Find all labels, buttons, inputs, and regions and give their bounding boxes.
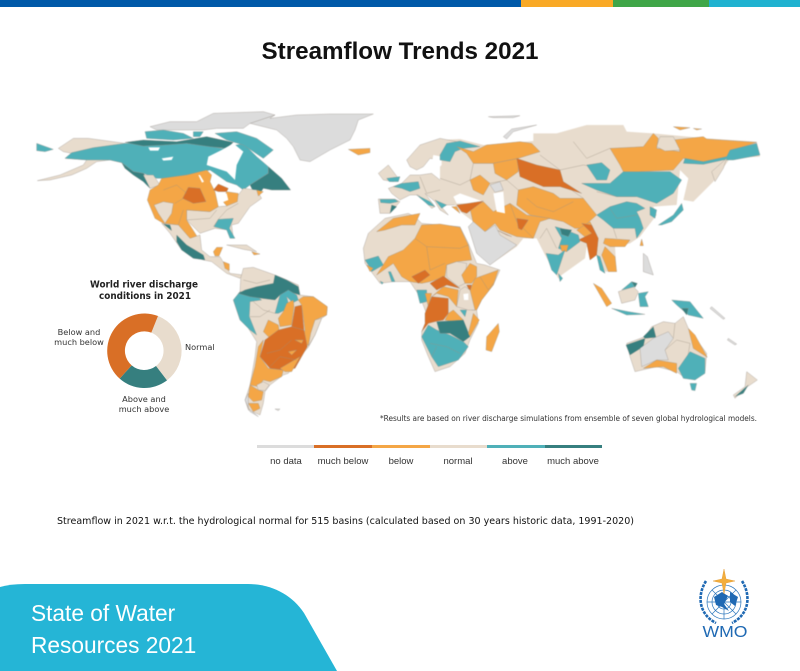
Iceland	[348, 148, 370, 155]
Central America orange	[223, 262, 229, 271]
Thailand	[602, 247, 617, 272]
Sakhalin and Primorye	[712, 158, 727, 182]
donut label: above and much above: Above and	[122, 394, 166, 404]
Congo orange	[432, 287, 458, 307]
legend colour bar	[257, 445, 602, 448]
Italy teal	[417, 195, 435, 207]
Britain	[378, 165, 398, 182]
Central Asia orange	[517, 187, 597, 228]
donut segments	[107, 313, 182, 388]
Borneo teal	[622, 282, 635, 290]
South America land	[233, 267, 327, 415]
New Zealand much above	[735, 385, 748, 397]
Lake region normal	[457, 287, 475, 310]
Yucatan orange	[213, 247, 223, 256]
Ob much below	[517, 158, 582, 193]
map region: South America	[233, 267, 327, 417]
donut label: above and much above: much above	[119, 404, 169, 414]
eastern USA	[187, 188, 262, 238]
Patagonia orange	[248, 385, 263, 402]
top colour bar	[0, 0, 800, 7]
Xingu normal	[287, 297, 292, 303]
south Australia orange	[643, 360, 677, 373]
Great Lakes	[218, 193, 228, 203]
Zambia orange	[445, 310, 463, 323]
map region: Southeast Asia and Oceania	[593, 282, 757, 398]
donut chart: world river discharge conditions	[54, 280, 215, 414]
northeast Brazil	[298, 297, 327, 346]
donut heading: World river discharge	[90, 280, 198, 290]
Ganges teal	[555, 227, 580, 252]
Lake Victoria basin	[467, 285, 472, 292]
Arctic islands	[150, 112, 275, 130]
legend	[257, 445, 602, 467]
Parana orange streak south	[288, 350, 297, 355]
Sahel and Nile orange	[377, 224, 472, 283]
Iberia	[378, 199, 400, 213]
Kimberley much above	[643, 327, 656, 338]
Peru and Ecuador basins	[233, 292, 262, 335]
map region: Africa	[363, 213, 500, 372]
logo: star	[713, 569, 735, 594]
New Guinea much above	[682, 308, 688, 315]
Lake Superior basin	[213, 184, 228, 192]
Great Basin	[154, 202, 173, 223]
Tasmania	[690, 383, 697, 391]
Japan	[658, 203, 683, 225]
British Columbia	[143, 175, 160, 188]
Gabon teal	[417, 290, 427, 303]
Asia land	[440, 125, 760, 278]
Scandinavia teal	[440, 141, 480, 162]
Tierra del Fuego coast	[245, 393, 258, 417]
southern Patagonia orange	[248, 403, 260, 412]
Iran much below	[497, 230, 512, 237]
southern Africa teal	[422, 325, 468, 367]
Senegal orange	[367, 265, 373, 272]
Borneo	[618, 287, 638, 303]
West Africa teal	[365, 256, 383, 272]
Far East teal	[683, 143, 760, 164]
northern Canada much above	[125, 137, 233, 148]
Cuba	[227, 245, 257, 252]
legend labels: normal	[443, 456, 473, 467]
Malay coast teal	[597, 255, 605, 273]
Africa land	[363, 213, 500, 372]
Mexico	[162, 223, 243, 278]
Borneo much above	[632, 282, 637, 287]
map region: Asia	[407, 116, 760, 282]
Mozambique orange	[468, 313, 479, 337]
west Turkey orange	[452, 207, 460, 213]
Java	[612, 308, 645, 315]
donut label: normal: Normal	[185, 342, 215, 352]
southeast China	[603, 238, 630, 247]
Brahmaputra orange	[577, 222, 597, 238]
Alaska	[37, 138, 125, 181]
Burma much below	[578, 223, 598, 260]
Arctic Canada island	[193, 132, 203, 137]
east Brazil normal	[308, 318, 322, 346]
legend labels: much above	[547, 456, 599, 467]
Canada	[65, 142, 268, 190]
Guinea coast teal	[388, 272, 395, 282]
Korea	[650, 207, 657, 218]
New Guinea teal	[672, 300, 703, 318]
Black Sea	[453, 193, 483, 203]
Australia land	[627, 317, 707, 380]
map footnote: *Results are based on river discharge simulations from ensemble of seven global hydrological models.	[380, 413, 757, 423]
Scandinavia	[407, 138, 457, 170]
Arctic orange sliver east	[693, 128, 702, 130]
Ethiopia orange	[462, 263, 477, 283]
Uruguay orange	[280, 357, 300, 372]
Turkey much below	[457, 201, 483, 213]
map region: Europe	[378, 160, 520, 215]
Thames teal	[387, 177, 400, 182]
East Siberia orange	[610, 133, 757, 178]
caption: Streamflow in 2021 w.r.t. the hydrological normal for 515 basins (calculated based on 30 years historic data, 1991-2020)	[57, 516, 634, 527]
Arctic orange sliver	[673, 127, 690, 130]
Baltic Sea	[431, 155, 442, 172]
Murray-Darling teal	[678, 352, 705, 380]
WMO logo	[701, 569, 748, 641]
Congo much below	[422, 297, 448, 332]
Missouri basin	[183, 187, 206, 203]
Ukraine basin	[470, 175, 490, 195]
Chad basin much below	[412, 270, 430, 283]
Zambezi much above	[437, 320, 470, 342]
Great Lakes orange	[222, 192, 238, 206]
Sulawesi	[638, 292, 648, 307]
mainland Europe	[388, 160, 520, 215]
East Africa orange	[470, 270, 498, 310]
Malawi teal	[460, 310, 467, 317]
Hudson Bay	[207, 143, 243, 180]
footer banner text: Resources 2021	[31, 632, 196, 658]
peninsular India teal	[546, 250, 565, 275]
Great Bear Lake	[148, 147, 160, 151]
Sri Lanka	[558, 273, 563, 282]
world map of streamflow conditions	[37, 112, 760, 417]
Sudan normal patch	[447, 262, 467, 287]
donut label: below and much below: much below	[54, 337, 104, 347]
Australia no data	[640, 332, 673, 367]
Tocantins	[278, 300, 294, 327]
Taiwan	[640, 239, 643, 246]
Iberia much above	[390, 205, 397, 213]
France and Alps teal	[393, 182, 420, 192]
central Argentina normal	[257, 382, 269, 391]
donut heading second line: conditions in 2021	[99, 291, 191, 302]
Greenland	[250, 114, 373, 162]
Bolivia	[263, 320, 279, 338]
north Argentina	[250, 340, 283, 387]
Pacific coast Canada	[122, 163, 158, 188]
Madagascar	[486, 323, 499, 352]
legend labels	[270, 456, 599, 467]
logo: globe	[707, 585, 741, 619]
Siberian normal patch	[657, 137, 680, 151]
Sumatra	[593, 283, 612, 307]
legend labels: no data	[270, 456, 303, 467]
Iberia teal	[380, 199, 398, 203]
Quebec and Maritimes	[250, 167, 291, 198]
Philippines	[643, 253, 653, 275]
China teal	[597, 202, 645, 238]
legend labels: below	[389, 456, 414, 467]
Pacific Mexico	[177, 235, 205, 260]
logo: laurel wreath	[701, 581, 747, 623]
logo: continents	[714, 592, 738, 611]
Volga	[493, 158, 518, 180]
Mahanadi orange	[560, 245, 568, 252]
Morocco and Algeria orange	[377, 213, 420, 232]
Helmand much below	[517, 218, 528, 230]
footer banner	[0, 584, 337, 671]
donut label: below and much below: Below and	[58, 327, 100, 337]
Svalbard	[488, 116, 520, 118]
logo: WMO text: WMO	[702, 624, 748, 641]
east Australia orange	[688, 328, 707, 357]
lower Amazon above	[275, 290, 298, 313]
Baikal teal	[587, 163, 610, 180]
footer banner text: State of Water	[31, 600, 176, 626]
Middle East orange	[470, 202, 550, 238]
Gulf of California	[163, 224, 172, 231]
Great Slave Lake	[162, 157, 173, 161]
Falkland Islands	[275, 409, 280, 411]
Amazon north much above	[238, 275, 300, 300]
map region: North America and Greenland	[37, 112, 373, 278]
Sao Francisco much below	[292, 305, 304, 330]
Congo north much below	[430, 276, 460, 290]
New Zealand	[733, 372, 757, 398]
Vanuatu and New Caledonia	[727, 338, 737, 345]
Arctic Canada	[145, 130, 193, 140]
Maine orange	[257, 190, 263, 196]
Ganges much above	[560, 228, 572, 237]
western USA	[147, 170, 218, 238]
Russian Arctic islands	[503, 125, 537, 139]
Russia west orange	[457, 142, 540, 163]
Parana orange streak	[295, 340, 303, 343]
Caspian Sea	[493, 192, 505, 213]
Parana much below	[260, 327, 307, 370]
Russian far east wrap-around	[37, 143, 53, 152]
no-data patch near Caspian	[490, 182, 503, 192]
southeast USA	[214, 218, 235, 238]
title: Streamflow Trends 2021	[262, 38, 538, 65]
Solomon Islands	[710, 307, 725, 319]
Ivory Coast teal	[380, 281, 383, 284]
Arabian Peninsula	[468, 222, 517, 265]
Balkans teal	[435, 200, 447, 208]
legend labels: above	[502, 456, 528, 467]
Lake Winnipeg	[198, 175, 204, 183]
Baffin Island	[215, 132, 273, 158]
Hispaniola orange	[252, 252, 260, 255]
Gabon orange	[425, 293, 432, 307]
Lake Tanganyika white	[463, 293, 468, 300]
legend labels: much below	[318, 456, 368, 467]
Western Australia much above	[626, 338, 645, 355]
Amur teal	[582, 172, 682, 203]
